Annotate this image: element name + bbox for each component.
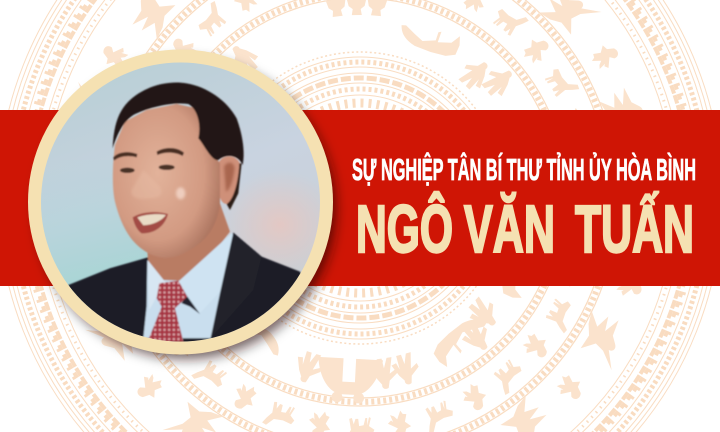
left eye (120, 168, 135, 173)
ear inner shadow (224, 163, 235, 192)
lapel (211, 233, 262, 338)
hair (113, 82, 244, 165)
portrait photo (41, 62, 320, 342)
collar shadow (182, 293, 200, 314)
cheek highlight (176, 187, 185, 199)
teeth (137, 214, 166, 225)
headline: person name (356, 192, 694, 267)
headline: person name: NGÔ (356, 192, 453, 267)
mouth (133, 212, 168, 233)
medallion drop shadow (36, 59, 336, 359)
ear (218, 156, 240, 204)
headline: person name: VĂN (464, 192, 555, 267)
left eyebrow (113, 152, 137, 161)
shirt body (142, 260, 222, 340)
necktie (148, 281, 187, 342)
neck (147, 203, 230, 281)
right eyebrow (157, 148, 184, 156)
hair sideburn (227, 163, 242, 210)
cream ring (28, 50, 333, 354)
portrait medallion (28, 50, 340, 363)
red banner (0, 110, 720, 286)
right eye (159, 165, 175, 170)
nose (132, 174, 158, 198)
collar left wing (148, 260, 165, 310)
suit jacket (68, 232, 301, 342)
collar right wing (179, 232, 234, 282)
face (113, 104, 220, 258)
